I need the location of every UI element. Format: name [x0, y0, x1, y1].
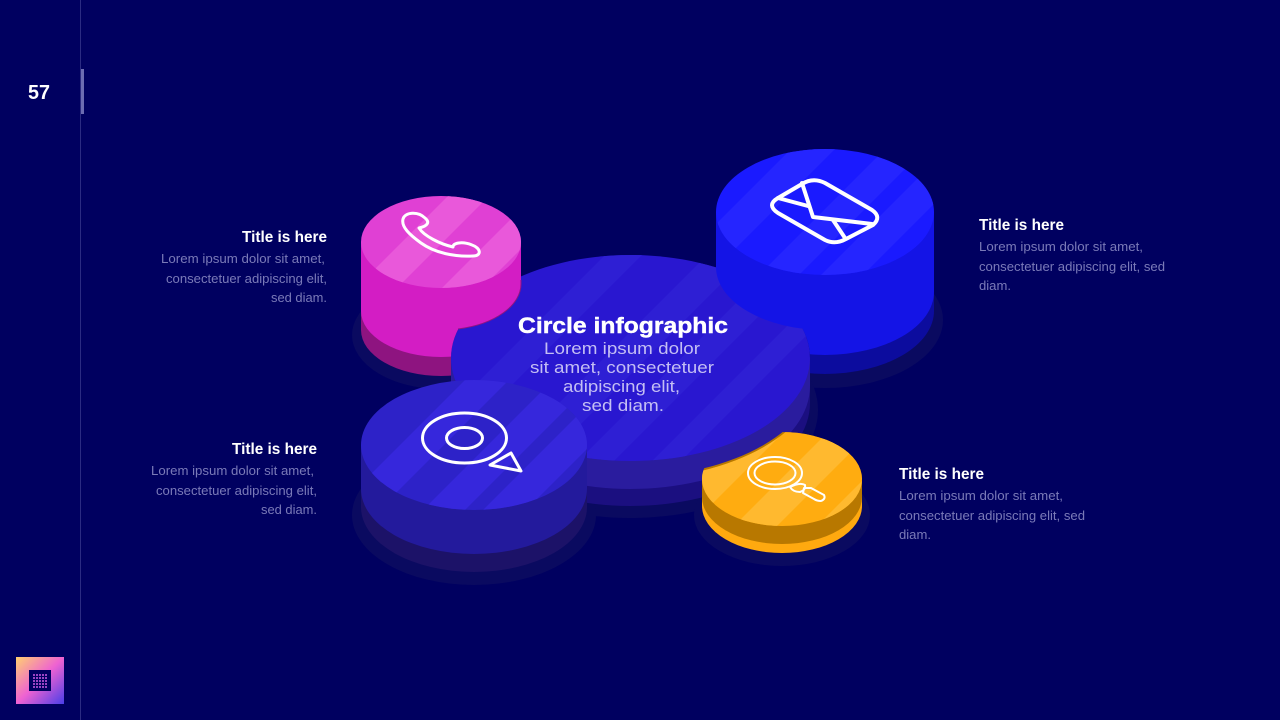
- centre top stripes: [588, 255, 806, 460]
- panel: centre cylinder: [451, 255, 810, 506]
- top left heading: Title is here: [242, 229, 327, 246]
- bottom left body: [151, 464, 317, 517]
- centre side wall: [451, 358, 810, 489]
- bottom right body: diam.: [899, 528, 931, 542]
- mail cylinder body: [716, 212, 934, 374]
- icon: magnifier: [748, 457, 825, 501]
- top right body: consectetuer adipiscing elit, sed: [979, 260, 1165, 274]
- location base band: [361, 445, 587, 572]
- text block: bottom left: [151, 441, 317, 517]
- page number: 57: [28, 82, 50, 104]
- phone top stripes: [376, 196, 521, 288]
- phone cylinder body: [361, 242, 521, 376]
- panel: mail cylinder: [716, 149, 934, 374]
- centre text block: adipiscing elit,: [563, 377, 680, 396]
- top right body: [979, 240, 1165, 293]
- panel: location cylinder: [361, 380, 587, 572]
- bottom left body: consectetuer adipiscing elit,: [156, 484, 317, 498]
- search top face: [702, 432, 862, 526]
- top left body: consectetuer adipiscing elit,: [166, 272, 327, 286]
- bottom right body: consectetuer adipiscing elit, sed: [899, 509, 1085, 523]
- page indicator: [81, 69, 84, 114]
- mail top face: [716, 149, 934, 275]
- location side wall: [361, 445, 587, 554]
- centre text block: [530, 339, 714, 415]
- bottom right heading: Title is here: [899, 466, 984, 483]
- bottom left body: Lorem ipsum dolor sit amet,: [151, 464, 314, 478]
- centre text block: Lorem ipsum dolor: [544, 339, 700, 358]
- top left body: sed diam.: [271, 291, 327, 305]
- search bite edge: [702, 432, 862, 478]
- text block: top right: [979, 217, 1165, 293]
- search bottom rim: [702, 479, 862, 553]
- mail top stripes: [718, 149, 934, 275]
- top left body: [161, 252, 327, 305]
- centre top face: [451, 255, 810, 461]
- centre heading: Circle infographic: [518, 313, 728, 338]
- phone top face: [361, 196, 521, 288]
- panel: phone cylinder: [361, 196, 522, 376]
- cylinder ground shadows: [352, 252, 943, 585]
- location top face: [361, 380, 587, 510]
- top right body: Lorem ipsum dolor sit amet,: [979, 240, 1143, 254]
- top right body: diam.: [979, 279, 1011, 293]
- location top stripes: [372, 380, 587, 510]
- top left body: Lorem ipsum dolor sit amet,: [161, 252, 325, 266]
- logo: [16, 657, 64, 704]
- text block: bottom right: [899, 466, 1085, 542]
- bottom right body: [899, 489, 1085, 542]
- icon: location pin: [422, 413, 521, 471]
- centre text block: sit amet, consectetuer: [530, 358, 714, 377]
- bottom left body: sed diam.: [261, 503, 317, 517]
- centre base band: [451, 358, 810, 506]
- bottom left heading: Title is here: [232, 441, 317, 458]
- icon: envelope: [772, 180, 877, 242]
- text block: top left: [161, 229, 327, 305]
- sidebar divider: [80, 0, 81, 720]
- top right heading: Title is here: [979, 217, 1064, 234]
- panel: search cylinder: [702, 432, 862, 553]
- icon: phone handset: [403, 213, 479, 256]
- bottom right body: Lorem ipsum dolor sit amet,: [899, 489, 1063, 503]
- phone body edge: [458, 280, 521, 329]
- centre text block: sed diam.: [582, 396, 664, 415]
- search band: [702, 479, 862, 544]
